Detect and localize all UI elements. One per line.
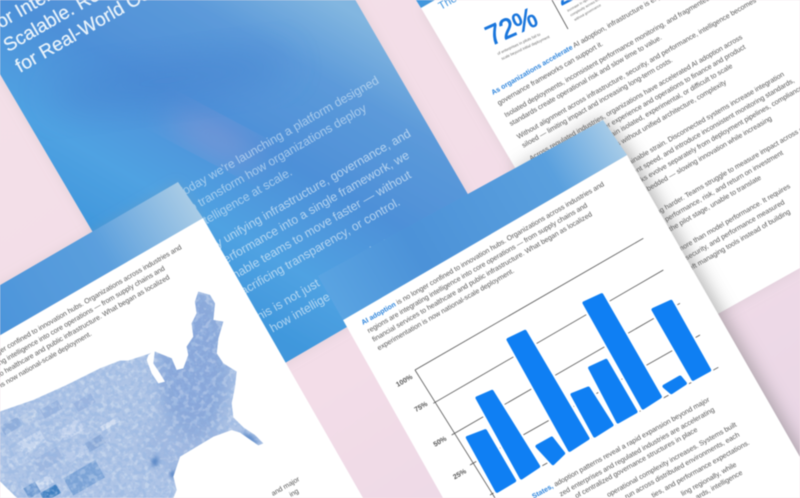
panel: report page with statistics — [416, 0, 800, 363]
panel header — [0, 182, 203, 370]
text block: report body: This growth creates unsustainable strain. Disconnected systems increase integration — [555, 71, 786, 208]
text block: announcement body: intelligence at scale. — [192, 165, 295, 232]
bars — [468, 295, 709, 491]
text block: chart analysis: operational complexity increases. Systems built — [606, 422, 738, 498]
text block: report body: Enterprise scale demands more than model performance. It requires — [605, 183, 792, 295]
text block: report body — [490, 0, 800, 332]
text block: report body: siloed — limiting impact and increasing long-term costs. — [521, 57, 674, 150]
text block: chart intro: experimentation is now national-scale deployment. — [376, 268, 516, 352]
text block: chart analysis: ling regionally, while — [680, 462, 738, 498]
stat: 72 percent: 72% — [481, 2, 542, 51]
text block: announcement body: By unifying infrastructure, governance, and — [206, 126, 413, 254]
text block: report body: and adoption often stalls at the pilot stage, unable to translate — [594, 175, 763, 276]
text block: report body: Across regulated industries, organizations have accelerated AI adoption across — [528, 34, 744, 163]
Great Lake — [147, 350, 165, 383]
text block: report body: standards create operational risk and slow time to value. — [508, 34, 663, 128]
text block: chart analysis: States, adoption patterns reveal a rapid expansion beyond major — [531, 396, 712, 498]
text block: chart analysis: ties, and performance expectations. — [651, 440, 751, 498]
text block: report body: customer support, customer experience and operations to finance and product — [534, 44, 747, 171]
text block: chart intro: regions are integrating intelligence into core operations — from supply chains and — [366, 202, 589, 335]
text block: report body: together so teams are not left managing tools instead of building — [616, 209, 792, 314]
axis labels: 50% — [432, 435, 449, 449]
stat: 72 percent: scale beyond initial deployment — [501, 35, 551, 61]
panel: blue launch announcement — [0, 0, 495, 413]
text block: announcement body: This is not just a new product. — [248, 234, 394, 327]
text block: chart intro: financial services to healthcare and public infrastructure. What began as localized — [371, 211, 594, 344]
text block: announcement body: enable teams to move faster — without — [224, 167, 414, 285]
bar chart — [395, 238, 718, 498]
text block: announcement body: sacrificing transparency, or control. — [232, 195, 402, 301]
bars halo — [468, 295, 709, 491]
stat: 72 percent: of enterprises in pilots fail to — [497, 32, 541, 56]
text block: chart analysis: of centralized governance structures in place — [574, 427, 699, 498]
text block: report body: risks become more than embedded — slowing innovation while increasing — [571, 115, 773, 236]
text block: report body: but most deployments remain isolated, experimental, or difficult to scale — [538, 63, 734, 180]
axis labels: 25% — [452, 468, 468, 481]
panel: map page — [0, 182, 363, 498]
panel: chart page — [318, 118, 800, 498]
text block: announcement body: to transform how organizations deploy — [184, 101, 370, 216]
text block: announcement body: how intelligence scales. — [267, 259, 385, 335]
text block: report body: infrastructure, governance, security, and performance measured — [610, 199, 786, 305]
text block: report body: Without alignment across infrastructure, security, and performance, intelligence becomes — [516, 0, 758, 141]
text block: report body: governance frameworks can support it. — [496, 41, 605, 107]
text block: announcement body: performance into a single framework, we — [214, 148, 412, 270]
text block: map intro — [0, 244, 198, 416]
text block: announcement body: Today we're launching a platform designed — [174, 73, 381, 201]
text block: map caption: and major — [270, 476, 302, 498]
text block: chart intro: AI adoption is no longer confined to innovation hubs. Organizations across industries and — [360, 181, 606, 327]
panel header — [318, 120, 627, 320]
text block: report body: while governance frameworks evolve separately from deployment pipelines, compliance — [565, 85, 800, 227]
axis labels: 75% — [413, 400, 430, 414]
text block: announcement body — [174, 73, 464, 342]
text block: report body: without shared visibility into performance, risk, and return on investment — [588, 150, 785, 267]
text block: report body: and leaves managed teams without unified architecture, complexity — [544, 79, 728, 189]
choropleth map: United States — [0, 287, 270, 498]
stat: second figure — [550, 0, 610, 22]
county blocks — [0, 393, 120, 498]
shadow cast on report page — [515, 118, 800, 498]
text block: chart analysis: zed enterprises and regulated industries are accelerating — [558, 407, 716, 498]
axis labels: 100% — [395, 373, 415, 389]
text block: report body: overhead, reduce deployment speed, and introduce inconsistent monitoring standards, — [560, 77, 796, 218]
stat: second figure: without governance — [574, 3, 602, 22]
axis labels — [395, 373, 468, 481]
